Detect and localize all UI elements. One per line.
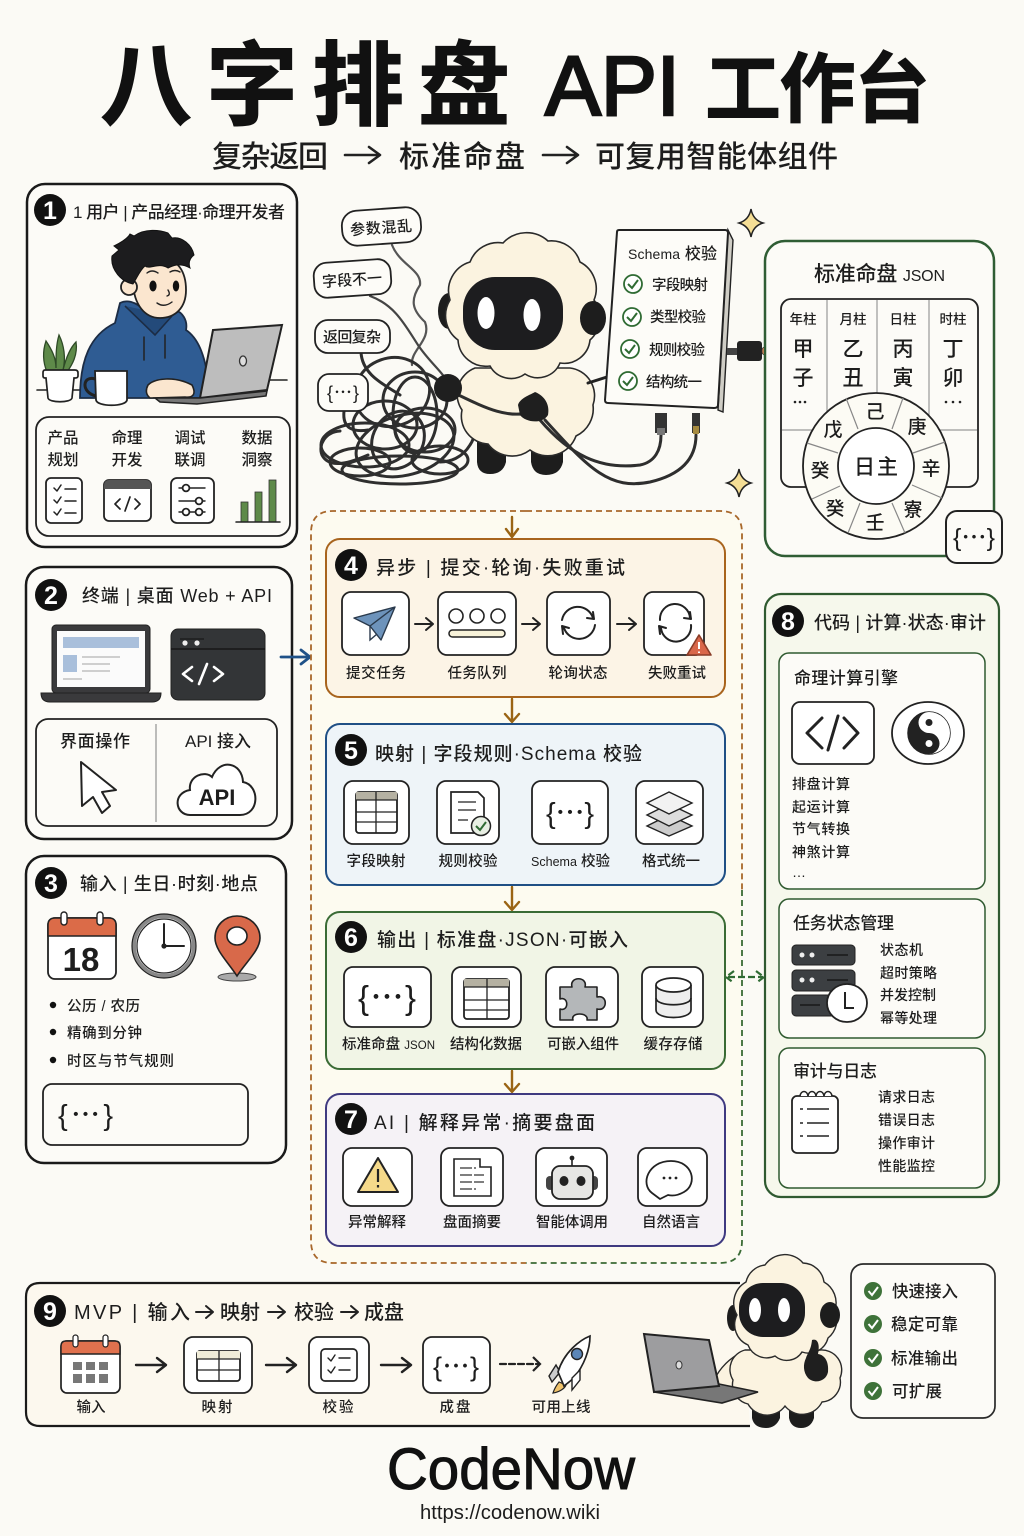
engine list: 排盘计算 xyxy=(792,776,850,792)
body xyxy=(730,1350,842,1415)
badge 2: 2 xyxy=(44,582,58,610)
check: field mapping: 字段映射 xyxy=(652,276,708,294)
tile: schema validation: {⋯} xyxy=(546,798,594,830)
label: data: 数据 xyxy=(242,429,272,447)
step: rocket launch xyxy=(532,1336,591,1416)
left hand xyxy=(434,374,462,402)
panel 9 heading: MVP | 输入 xyxy=(74,1301,190,1324)
interface and API box xyxy=(36,719,277,826)
dashed arrow xyxy=(500,1363,538,1365)
four pillars table: 丙 xyxy=(892,338,914,361)
arrow: step 6 to 7 xyxy=(505,1071,519,1092)
icon: code xyxy=(792,702,874,764)
task list: 状态机 xyxy=(880,942,923,958)
label: API access: API 接入 xyxy=(185,732,251,751)
subtitle xyxy=(212,141,838,174)
tile: polling status xyxy=(547,592,610,682)
four pillars table xyxy=(781,299,978,487)
panel 7 heading: AI | 解释异常·摘要盘面 xyxy=(374,1112,595,1134)
arrow xyxy=(522,618,540,630)
title: API xyxy=(545,39,680,133)
icon: map pin xyxy=(215,916,260,981)
step: rocket launch: 可用上线 xyxy=(532,1399,591,1416)
icon: servers and clock xyxy=(792,945,867,1022)
four pillars table: 丁 xyxy=(942,338,964,361)
check: standard output xyxy=(864,1349,958,1368)
check: field mapping xyxy=(624,275,708,294)
tile: polling status: 轮询状态 xyxy=(548,664,608,682)
engine list: 起运计算 xyxy=(792,799,850,815)
check: extensible xyxy=(864,1382,942,1401)
badge 2 xyxy=(35,579,67,611)
sheep right ear xyxy=(580,301,606,335)
step: chart xyxy=(423,1337,490,1416)
task list: 超时策略 xyxy=(880,965,937,981)
tile: structured data xyxy=(450,967,522,1053)
panel: benefits xyxy=(851,1264,995,1418)
tile: field mapping xyxy=(344,781,409,870)
tile: anomaly explanation xyxy=(343,1148,412,1231)
sub panel: audit: 审计与日志 xyxy=(793,1061,877,1081)
left ear xyxy=(727,1305,739,1331)
sparkle bottom xyxy=(727,469,751,497)
illustration: tangled cables xyxy=(321,245,476,487)
bubble: complex return: 返回复杂 xyxy=(323,329,381,346)
audit list: 操作审计 xyxy=(878,1135,935,1151)
check: unified structure xyxy=(619,372,702,391)
sub panel: calculation engine xyxy=(779,653,985,889)
panel 9: MVP xyxy=(26,1283,750,1426)
tile: natural language xyxy=(638,1148,707,1231)
label: product planning: 产品 xyxy=(48,429,78,447)
check: rule validation: 规则校验 xyxy=(649,341,706,359)
microphone arm xyxy=(588,376,610,383)
four pillars table: 年柱 xyxy=(790,311,817,327)
day master wheel xyxy=(803,393,949,539)
panel 9 heading xyxy=(74,1301,404,1324)
label: development: 开发 xyxy=(112,451,143,469)
sheep body xyxy=(457,368,595,456)
tile: unified format: 格式统一 xyxy=(642,852,700,870)
url: https://codenow.wiki xyxy=(420,1502,600,1524)
four pillars table: 寅 xyxy=(892,367,914,390)
audit list xyxy=(878,1089,935,1174)
day master wheel: 庚 xyxy=(907,416,927,438)
check: type validation: 类型校验 xyxy=(650,308,706,326)
sub panel: calculation engine: 命理计算引擎 xyxy=(794,668,898,688)
bullet list: 公历 / 农历 xyxy=(67,998,140,1015)
audit list: 请求日志 xyxy=(878,1089,935,1105)
panel 9 heading: 成盘 xyxy=(364,1301,404,1324)
head wool xyxy=(734,1255,837,1360)
day master wheel: 壬 xyxy=(865,512,885,534)
arrow xyxy=(617,618,636,630)
subtitle: 标准命盘 xyxy=(399,141,525,174)
badge 5 xyxy=(335,734,367,766)
badge 1 xyxy=(34,194,66,226)
arrow xyxy=(415,618,433,630)
panel 1: user xyxy=(27,184,297,547)
bullet list xyxy=(50,998,174,1070)
title: 八字排盘 xyxy=(100,36,510,138)
tile: schema validation: Schema 校验 xyxy=(531,852,610,870)
tile: natural language: 自然语言 xyxy=(642,1213,700,1231)
skills box xyxy=(36,417,290,536)
day master wheel: 辛 xyxy=(921,458,941,480)
panel: schema validation tablet xyxy=(605,230,768,435)
tile: chart summary: 盘面摘要 xyxy=(443,1213,501,1231)
check: stable: 稳定可靠 xyxy=(891,1314,958,1334)
icon: checklist xyxy=(46,478,82,523)
label: mingli: 命理 xyxy=(112,428,143,447)
icon: code window xyxy=(104,480,151,521)
engine list: 神煞计算 xyxy=(792,844,850,860)
panel: standard chart JSON xyxy=(765,241,1002,563)
step: mapping: 映射 xyxy=(202,1399,232,1416)
check: extensible: 可扩展 xyxy=(892,1382,942,1401)
badge 3 xyxy=(35,867,67,899)
panel 1 heading: 1 用户 | 产品经理·命理开发者 xyxy=(73,202,285,222)
day master wheel: 日主 xyxy=(854,456,898,479)
panel 7: AI xyxy=(326,1094,725,1246)
day master wheel: 寮 xyxy=(903,499,923,521)
bullet list: 时区与节气规则 xyxy=(67,1053,174,1070)
title xyxy=(100,36,930,138)
check: type validation xyxy=(623,308,706,326)
arrow: step 4 to 5 xyxy=(505,699,519,722)
engine list: 节气转换 xyxy=(792,821,850,837)
tile: schema validation xyxy=(531,781,610,870)
tablet side connector xyxy=(727,341,768,361)
tile: rule validation xyxy=(437,781,499,870)
icon: notepad xyxy=(792,1092,838,1153)
four pillars table: 子 xyxy=(792,367,814,390)
icon: API cloud: API xyxy=(199,785,235,810)
label: insights: 洞察 xyxy=(242,451,273,469)
icon: clock xyxy=(132,914,196,978)
legs xyxy=(752,1396,814,1428)
tile: unified format xyxy=(636,781,703,870)
bubble: fields inconsistent xyxy=(313,258,392,299)
tile: standard JSON xyxy=(342,967,435,1053)
bubble: parameters messy xyxy=(341,206,422,247)
four pillars table: 丑 xyxy=(842,367,864,390)
panel 8: code xyxy=(765,594,999,1197)
right hand with plug xyxy=(518,392,548,421)
task list xyxy=(880,942,937,1026)
check: standard output: 标准输出 xyxy=(891,1349,958,1368)
panel 3: input xyxy=(26,856,286,1163)
day master wheel: 戊 xyxy=(823,419,843,441)
tablet title: Schema 校验 xyxy=(628,244,717,263)
logo: CodeNow: CodeNow xyxy=(387,1437,636,1502)
panel 5: mapping xyxy=(326,724,725,885)
JSON badge: {⋯} xyxy=(953,524,995,552)
icon: bar chart xyxy=(236,480,280,522)
illustration: developer with laptop xyxy=(37,230,287,405)
panel 4 heading: 异步 | 提交·轮询·失败重试 xyxy=(376,557,625,579)
tablet bottom connectors xyxy=(655,413,700,435)
arm to laptop xyxy=(714,1352,750,1392)
sheep eyes xyxy=(478,297,540,331)
icon: yin yang xyxy=(892,702,964,764)
JSON badge xyxy=(946,511,1002,563)
panel 6: output xyxy=(326,912,725,1069)
four pillars table: 日柱 xyxy=(890,312,917,327)
right ear xyxy=(820,1302,840,1328)
icon: laptop xyxy=(41,625,161,702)
arrow xyxy=(381,1358,411,1372)
tile: submit task: 提交任务 xyxy=(346,664,406,682)
arrow xyxy=(136,1358,166,1372)
audit list: 错误日志 xyxy=(878,1112,935,1128)
illustration: sheep with laptop xyxy=(644,1255,842,1428)
engine list: … xyxy=(792,864,806,880)
check: fast access xyxy=(864,1282,958,1301)
panel 8 heading: 代码 | 计算·状态·审计 xyxy=(814,612,986,633)
arrow xyxy=(266,1358,296,1372)
arrow: step 5 to 6 xyxy=(505,887,519,910)
check: stable xyxy=(864,1314,958,1334)
badge 7: 7 xyxy=(344,1106,358,1134)
step: calendar input xyxy=(61,1335,120,1416)
badge 7 xyxy=(335,1103,367,1135)
bubble: fields inconsistent: 字段不一 xyxy=(322,269,383,291)
step: mapping xyxy=(184,1337,252,1416)
face xyxy=(739,1283,805,1337)
engine list xyxy=(792,776,850,880)
tile: chart summary xyxy=(441,1148,503,1231)
sub panel: task state: 任务状态管理 xyxy=(793,914,894,933)
tile: structured data: 结构化数据 xyxy=(450,1036,522,1053)
step: calendar input: 输入 xyxy=(76,1399,106,1416)
tile: submit task xyxy=(342,592,409,682)
badge 8 xyxy=(772,605,804,637)
arrow: into step 4 xyxy=(506,517,518,537)
tile: anomaly explanation: 异常解释 xyxy=(348,1214,406,1231)
sub panel: task state xyxy=(779,899,985,1038)
step: chart: 成盘 xyxy=(440,1398,470,1416)
day master wheel: 癸 xyxy=(810,460,830,482)
icon: calendar 18: 18 xyxy=(63,941,99,978)
label: integration: 联调 xyxy=(174,451,206,469)
tile: agent call: 智能体调用 xyxy=(536,1213,608,1231)
arrow: output to code panel xyxy=(726,971,764,983)
badge 9: 9 xyxy=(43,1298,57,1326)
badge 3: 3 xyxy=(44,870,58,898)
bubble: parameters messy: 参数混乱 xyxy=(350,217,413,239)
step: chart: {⋯} xyxy=(433,1352,479,1382)
panel 2: terminal xyxy=(26,567,292,839)
label: planning second line: 规划 xyxy=(48,451,78,469)
warning triangle xyxy=(687,635,711,655)
day master wheel: 己 xyxy=(865,402,885,423)
step: validation xyxy=(309,1337,369,1416)
badge 5: 5 xyxy=(344,737,358,765)
bullet list: 精确到分钟 xyxy=(67,1025,142,1042)
check: rule validation xyxy=(621,340,706,359)
tile: failure retry: 失败重试 xyxy=(648,665,706,682)
eyes xyxy=(749,1298,790,1322)
badge 4 xyxy=(335,549,367,581)
tile: embeddable component xyxy=(546,967,619,1053)
panel 9 heading: 映射 xyxy=(220,1301,260,1324)
panel 4: async xyxy=(326,539,725,697)
panel 6 heading: 输出 | 标准盘·JSON·可嵌入 xyxy=(377,929,628,951)
badge 6: 6 xyxy=(344,924,358,952)
icon: sliders xyxy=(171,478,214,523)
label: UI operation: 界面操作 xyxy=(60,732,130,751)
JSON placeholder box: {⋯} xyxy=(58,1100,113,1132)
icon: API cloud xyxy=(178,765,255,815)
four pillars table: 乙 xyxy=(842,338,864,361)
panel 5 heading: 映射 | 字段规则·Schema 校验 xyxy=(375,743,642,765)
panel 9 heading: 校验 xyxy=(294,1301,334,1324)
cables to tablet xyxy=(448,390,696,484)
task list: 幂等处理 xyxy=(880,1010,937,1026)
step: validation: 校验 xyxy=(322,1398,354,1416)
bubble: json: {⋯} xyxy=(327,383,359,403)
laptop xyxy=(644,1334,758,1403)
four pillars table: 卯 xyxy=(942,367,964,390)
title: 工作台 xyxy=(705,48,930,133)
four pillars table: 时柱 xyxy=(940,312,967,327)
day master wheel: 癸 xyxy=(825,498,845,520)
check: unified structure: 结构统一 xyxy=(646,373,702,391)
label: debugging: 调试 xyxy=(174,429,206,447)
sheep left ear xyxy=(438,293,460,329)
arrow: terminal to pipeline xyxy=(281,650,310,664)
sparkle top xyxy=(739,209,763,237)
tile: field mapping: 字段映射 xyxy=(346,852,406,870)
tile: cache storage: 缓存存储 xyxy=(644,1036,702,1053)
panel 2 heading: 终端 | 桌面 Web + API xyxy=(82,586,272,606)
pipeline dashed container xyxy=(311,511,742,1263)
bubble: complex return xyxy=(315,320,390,353)
sheep head wool xyxy=(446,233,600,378)
subtitle: 可复用智能体组件 xyxy=(595,141,838,174)
sheep face xyxy=(463,277,563,350)
tile: agent call xyxy=(536,1148,608,1231)
four pillars table: 月柱 xyxy=(840,312,867,327)
subtitle: 复杂返回 xyxy=(212,141,328,174)
illustration: sheep mascot holding cables xyxy=(434,233,696,484)
badge 1: 1 xyxy=(43,197,57,225)
icon: calendar 18 xyxy=(48,912,116,979)
sheep legs xyxy=(477,440,563,475)
thumbs up hand xyxy=(804,1340,828,1381)
tile: cache storage xyxy=(642,967,703,1053)
badge 4: 4 xyxy=(344,552,358,580)
badge 9 xyxy=(34,1295,66,1327)
tile: task queue: 任务队列 xyxy=(448,665,506,682)
tile: embeddable component: 可嵌入组件 xyxy=(547,1036,619,1053)
sub panel: audit xyxy=(779,1048,985,1188)
four pillars table: 甲 xyxy=(792,338,814,361)
icon: terminal window xyxy=(171,629,265,700)
panel 3 heading: 输入 | 生日·时刻·地点 xyxy=(80,874,258,894)
task list: 并发控制 xyxy=(880,987,936,1003)
tile: standard JSON: {⋯} xyxy=(358,979,416,1016)
JSON placeholder box xyxy=(43,1084,248,1145)
tile: rule validation: 规则校验 xyxy=(438,852,498,870)
badge 6 xyxy=(335,921,367,953)
audit list: 性能监控 xyxy=(878,1158,935,1174)
tile: standard JSON: 标准命盘 JSON xyxy=(342,1035,435,1053)
tile: failure retry xyxy=(644,592,711,682)
tile: task queue xyxy=(438,592,516,682)
check: fast access: 快速接入 xyxy=(892,1282,958,1301)
bubble: json xyxy=(318,374,368,411)
badge 8: 8 xyxy=(781,608,795,636)
icon: cursor xyxy=(81,762,116,813)
chart heading: 标准命盘 JSON xyxy=(814,262,945,286)
